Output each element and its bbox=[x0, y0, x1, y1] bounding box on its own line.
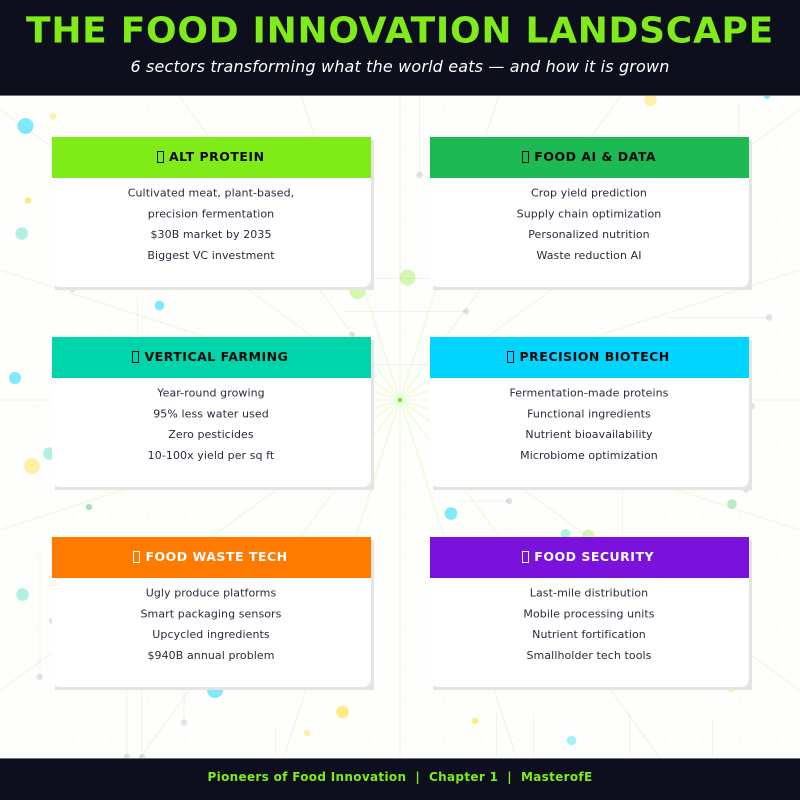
text: food ai details: Waste reduction AI bbox=[536, 249, 642, 262]
subtitle: 6 sectors transforming what the world eats — and how it is grown bbox=[130, 57, 670, 76]
text: alt protein details: precision fermentation bbox=[148, 207, 274, 220]
heading: precision biotech bbox=[430, 337, 749, 378]
text: food security details: Smallholder tech tools bbox=[526, 649, 652, 662]
text: alt protein details: Cultivated meat, plant-based, bbox=[128, 186, 294, 200]
heading: food ai and data bbox=[430, 137, 749, 178]
text: food security details: Nutrient fortification bbox=[532, 628, 646, 641]
footer text: Pioneers of Food Innovation | Chapter 1 | MasterofE bbox=[208, 770, 592, 784]
text: food waste details: $940B annual problem bbox=[147, 649, 275, 662]
panel: food security bbox=[430, 537, 752, 690]
text: food security details: Mobile processing units bbox=[523, 607, 655, 620]
text: food ai details bbox=[517, 186, 661, 262]
text: precision biotech details: Fermentation-made proteins bbox=[510, 386, 669, 400]
heading: food security bbox=[430, 537, 749, 578]
heading: vertical farming: VERTICAL FARMING bbox=[144, 349, 288, 364]
heading: food security: FOOD SECURITY bbox=[534, 549, 654, 564]
footer band bbox=[0, 758, 800, 800]
panel: food waste tech bbox=[52, 537, 374, 690]
panel: precision biotech bbox=[430, 337, 752, 490]
text: food waste details: Ugly produce platforms bbox=[146, 586, 276, 600]
text: vertical farming details: 95% less water used bbox=[153, 407, 269, 420]
text: food ai details: Personalized nutrition bbox=[528, 228, 650, 241]
text: precision biotech details: Functional ingredients bbox=[527, 407, 651, 420]
text: vertical farming details: Year-round growing bbox=[156, 386, 265, 400]
text: food ai details: Crop yield prediction bbox=[531, 186, 647, 200]
heading: alt protein bbox=[52, 137, 371, 178]
text: precision biotech details bbox=[510, 386, 669, 462]
heading: precision biotech: PRECISION BIOTECH bbox=[520, 349, 670, 364]
text: precision biotech details: Nutrient bioavailability bbox=[525, 428, 653, 441]
heading: food waste tech bbox=[52, 537, 371, 578]
header band bbox=[0, 0, 800, 96]
text: vertical farming details bbox=[148, 386, 275, 462]
heading: food ai and data: FOOD AI & DATA bbox=[534, 149, 656, 164]
text: alt protein details: Biggest VC investment bbox=[147, 249, 275, 262]
text: alt protein details bbox=[128, 186, 294, 262]
text: vertical farming details: 10-100x yield per sq ft bbox=[148, 449, 275, 462]
text: food waste details: Upcycled ingredients bbox=[152, 628, 270, 641]
text: food ai details: Supply chain optimization bbox=[517, 207, 661, 220]
heading: vertical farming bbox=[52, 337, 371, 378]
title: THE FOOD INNOVATION LANDSCAPE bbox=[26, 10, 774, 52]
panel: vertical farming bbox=[52, 337, 374, 490]
panel: alt protein bbox=[52, 137, 374, 290]
text: food security details: Last-mile distribution bbox=[530, 586, 648, 600]
heading: food waste tech: FOOD WASTE TECH bbox=[146, 549, 288, 564]
heading: alt protein: ALT PROTEIN bbox=[169, 149, 265, 164]
text: food security details bbox=[523, 586, 655, 662]
panel: food ai and data bbox=[430, 137, 752, 290]
text: precision biotech details: Microbiome optimization bbox=[520, 449, 658, 462]
text: food waste details bbox=[141, 586, 282, 662]
text: food waste details: Smart packaging sensors bbox=[141, 607, 282, 620]
text: vertical farming details: Zero pesticides bbox=[168, 428, 254, 441]
text: alt protein details: $30B market by 2035 bbox=[150, 228, 272, 241]
